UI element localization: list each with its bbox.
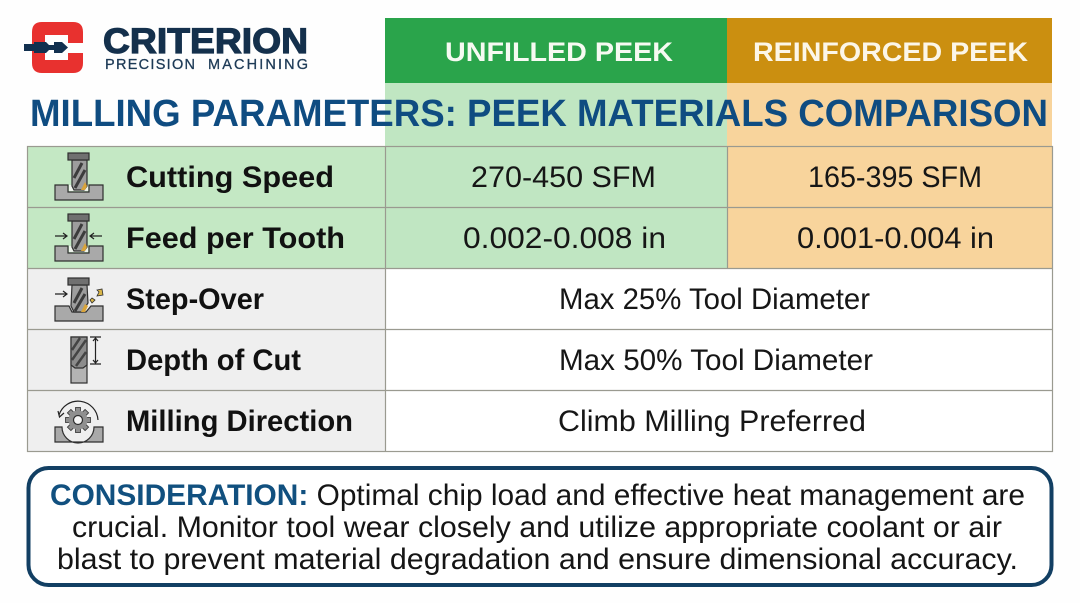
label: Step-Over bbox=[126, 283, 264, 316]
label: Feed per Tooth bbox=[126, 222, 345, 255]
column header: Unfilled PEEK bbox=[385, 18, 727, 83]
comparison table bbox=[27, 146, 1052, 452]
row: Milling Direction bbox=[28, 390, 1052, 452]
callout text line 1: CONSIDERATION: Optimal chip load and effective heat management are bbox=[50, 479, 1025, 512]
icon: gear with rotation arrow bbox=[55, 401, 103, 443]
column header: Reinforced PEEK: REINFORCED PEEK bbox=[753, 37, 1029, 67]
value: Max 25% Tool Diameter bbox=[559, 283, 870, 316]
icon: end mill with depth dimension bbox=[71, 337, 101, 383]
title: MILLING PARAMETERS: PEEK MATERIALS COMPARISON bbox=[30, 93, 1048, 135]
icon: end mill in slot bbox=[55, 153, 103, 200]
label: Milling Direction bbox=[126, 405, 353, 438]
value: reinforced: 0.001-0.004 in bbox=[797, 222, 994, 255]
row: Cutting Speed bbox=[28, 146, 1052, 208]
column header: Reinforced PEEK bbox=[727, 18, 1052, 83]
callout text line 2: crucial. Monitor tool wear closely and utilize appropriate coolant or air bbox=[72, 511, 1002, 544]
row: Depth of Cut bbox=[28, 330, 1052, 390]
icon: end mill with feed arrows bbox=[55, 214, 103, 261]
callout text line 3: blast to prevent material degradation and ensure dimensional accuracy. bbox=[57, 543, 1018, 576]
value: unfilled: 0.002-0.008 in bbox=[463, 222, 666, 255]
value: Climb Milling Preferred bbox=[558, 405, 866, 438]
row: Step-Over bbox=[28, 268, 1052, 330]
icon: red C with cutting tool bbox=[24, 22, 83, 73]
value: reinforced: 165-395 SFM bbox=[808, 161, 982, 194]
logo: Criterion Precision Machining bbox=[24, 22, 308, 73]
label: Cutting Speed bbox=[126, 161, 334, 194]
column header: Unfilled PEEK: UNFILLED PEEK bbox=[445, 37, 674, 67]
callout: consideration bbox=[28, 468, 1052, 585]
logo tagline bbox=[105, 57, 308, 73]
value: unfilled: 270-450 SFM bbox=[471, 161, 656, 194]
logo wordmark: CRITERION bbox=[103, 22, 308, 61]
tint band: unfilled column behind title bbox=[385, 83, 727, 146]
tint band: reinforced column behind title bbox=[727, 83, 1052, 146]
label: Depth of Cut bbox=[126, 344, 301, 377]
logo tagline: PRECISION bbox=[105, 57, 195, 73]
row: Feed per Tooth bbox=[28, 208, 1052, 268]
icon: end mill with chips bbox=[55, 278, 103, 321]
logo tagline: MACHINING bbox=[208, 57, 308, 73]
value: Max 50% Tool Diameter bbox=[559, 344, 873, 377]
